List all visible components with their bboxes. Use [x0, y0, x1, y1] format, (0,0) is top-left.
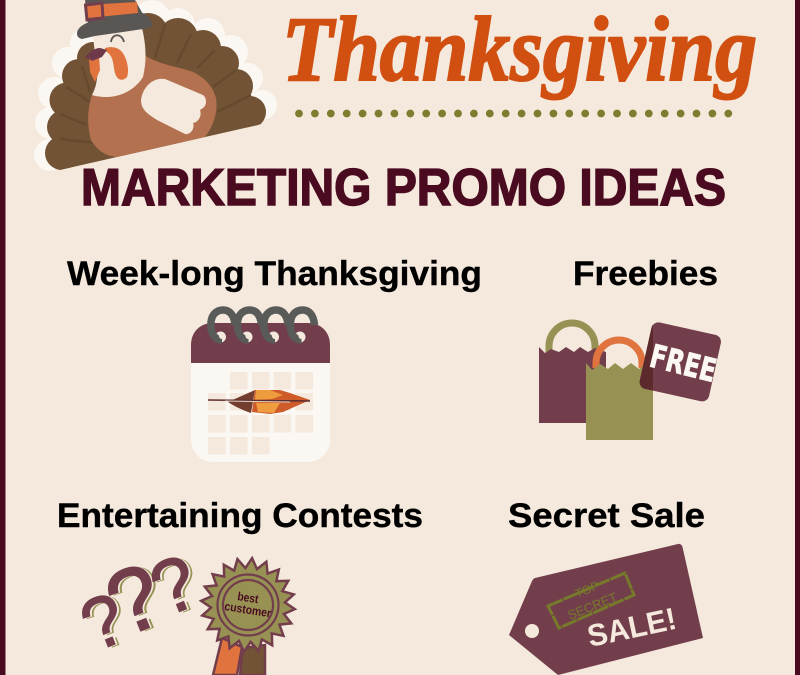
question mark right: ? — [141, 539, 212, 633]
olive bag — [586, 363, 653, 440]
tag overlap — [640, 324, 653, 391]
free tag — [638, 321, 722, 403]
question mark right: ? — [143, 539, 214, 634]
turkey body — [88, 56, 217, 157]
question mark left: ? — [74, 578, 141, 668]
calendar header — [191, 323, 330, 363]
icon: best customer badge — [197, 554, 299, 675]
turkey white tail tips — [34, 0, 277, 171]
seal text customer: customer — [224, 599, 272, 620]
calendar feather — [208, 390, 310, 414]
turkey beak — [85, 48, 107, 61]
top secret stamp: TOP — [573, 578, 601, 601]
icon: turkey — [34, 0, 277, 171]
dotted divider — [299, 110, 730, 117]
question mark right: ? — [139, 539, 210, 633]
heading: entertaining contests: Entertaining Contests — [57, 497, 423, 535]
question mark left: ? — [72, 578, 139, 667]
tag shape — [509, 544, 703, 675]
turkey hat — [77, 0, 152, 39]
top secret stamp: SECRET — [566, 589, 619, 623]
ribbon brown — [240, 645, 265, 675]
turkey eye — [111, 35, 124, 42]
question mark middle: ? — [98, 545, 181, 656]
heading: freebies: Freebies — [573, 255, 718, 293]
sale label: SALE! — [584, 601, 679, 654]
calendar page — [191, 323, 330, 462]
maroon bag — [539, 347, 606, 423]
tag hole — [525, 624, 539, 638]
icon: sale tag — [509, 544, 703, 675]
bag handle orange — [596, 340, 642, 368]
question mark middle: ? — [95, 545, 179, 656]
icon: calendar — [191, 310, 330, 462]
question mark middle: ? — [93, 545, 177, 656]
question mark left: ? — [70, 578, 137, 667]
turkey head — [92, 28, 146, 97]
turkey wattle — [89, 47, 128, 82]
subtitle: MARKETING PROMO IDEAS — [81, 159, 726, 217]
heading: secret sale: Secret Sale — [508, 497, 705, 535]
turkey feather ribs — [60, 24, 251, 143]
turkey wing — [141, 79, 206, 134]
ribbon orange — [213, 638, 242, 675]
calendar grid — [208, 372, 313, 454]
seal — [197, 554, 299, 656]
bag handle olive — [549, 323, 595, 352]
top secret stamp — [548, 573, 634, 628]
title: Thanksgiving — [282, 0, 757, 100]
calendar rings — [211, 310, 314, 342]
seal text best: best — [237, 589, 259, 606]
icon: shopping bags with free tag — [539, 321, 722, 440]
free label: FREE — [646, 337, 720, 390]
icon: question marks — [70, 537, 214, 669]
heading: week-long thanksgiving: Week-long Thanksgiving — [67, 255, 482, 293]
turkey brown tail feathers — [45, 13, 266, 170]
